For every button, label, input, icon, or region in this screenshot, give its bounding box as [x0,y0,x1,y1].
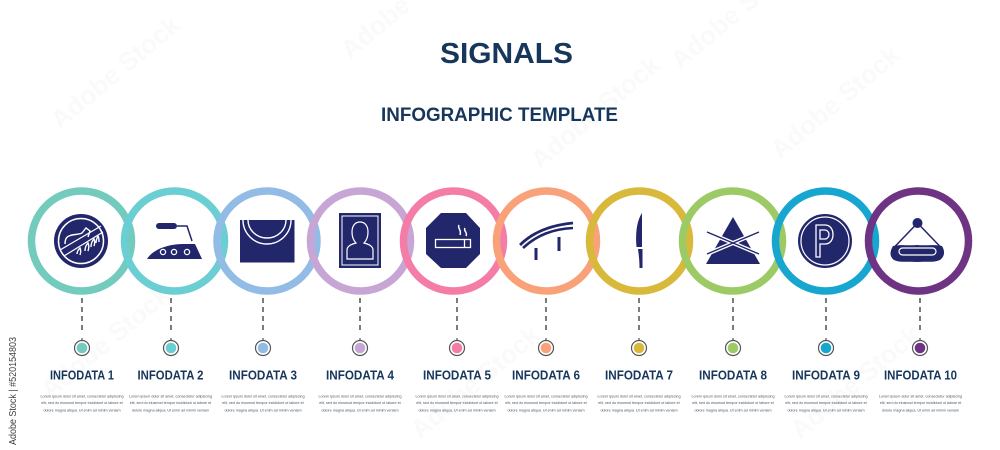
item 8: label and text: Lorem ipsum dolor sit amet, consectetur adipiscing [691,394,775,398]
item 5: label and text: dolore magna aliqua. Ut enim ad minim veniam [418,408,496,412]
item 5: connector and dot [450,298,464,356]
item 3: label and text: dolore magna aliqua. Ut enim ad minim veniam [224,408,302,412]
item 2: label and text: Lorem ipsum dolor sit amet, consectetur adipiscing [129,394,212,398]
item 8: label and text: elit, sed do eiusmod tempor incididunt ut labore et [692,401,774,405]
title: SIGNALS [440,38,573,70]
watermark: Adobe Stock [45,9,186,135]
item 5: ring [404,191,504,291]
item 9: ring [776,191,876,291]
item 10: label and text [879,368,962,412]
item 4: label and text [318,368,402,412]
subtitle: INFOGRAPHIC TEMPLATE [381,105,618,126]
item 7: connector and dot [632,298,646,356]
item 9: label and text: Lorem ipsum dolor sit amet, consectetur adipiscing [784,394,868,398]
item 9: label and text: INFODATA 9 [792,368,860,382]
item 9: label and text: dolore magna aliqua. Ut enim ad minim veniam [787,408,865,412]
icon: bridge [520,223,573,260]
item 3: label and text: INFODATA 3 [229,368,297,382]
item 5: label and text: INFODATA 5 [423,368,491,382]
item 8: label and text: INFODATA 8 [699,368,767,382]
item 9: connector and dot [818,298,834,356]
item 1: connector and dot [74,298,90,356]
stock id side text: Adobe Stock | #520154803 [7,337,19,445]
item 10: label and text: dolore magna aliqua. Ut enim ad minim veniam [882,408,959,412]
item 4: label and text: INFODATA 4 [326,368,395,382]
item 10: label and text: Lorem ipsum dolor sit amet, consectetur adipiscing [879,394,962,398]
item 1: label and text [40,368,124,412]
item 4: label and text: dolore magna aliqua. Ut enim ad minim veniam [321,408,399,412]
item 10: ring [868,191,968,291]
item 6: connector and dot [538,298,554,356]
item 2: label and text: dolore magna aliqua. Ut enim ad minim veniam [132,408,209,412]
watermark: Adobe Stock [35,279,176,405]
item 5: label and text: elit, sed do eiusmod tempor incididunt ut labore et [416,401,498,405]
item 3: label and text: Lorem ipsum dolor sit amet, consectetur adipiscing [221,394,305,398]
item 4: connector and dot [352,298,368,356]
item 7: label and text: Lorem ipsum dolor sit amet, consectetur adipiscing [597,394,681,398]
item 6: label and text: elit, sed do eiusmod tempor incididunt ut labore et [505,401,587,405]
icon: bag [240,220,294,262]
watermark: Adobe Stock [525,49,666,175]
item 2: connector and dot [164,298,178,356]
icon: no shoe sign [54,214,108,268]
item 3: ring [217,191,317,291]
item 2: label and text: elit, sed do eiusmod tempor incididunt ut labore et [130,401,211,405]
item 6: label and text [504,368,588,412]
item 2: label and text [129,368,212,412]
item 8: connector and dot [726,298,740,356]
item 8: label and text [691,368,775,412]
item 6: label and text: Lorem ipsum dolor sit amet, consectetur adipiscing [504,394,588,398]
item 9: label and text: elit, sed do eiusmod tempor incididunt ut labore et [785,401,867,405]
item 1: label and text: elit, sed do eiusmod tempor incididunt ut labore et [41,401,123,405]
item 1: label and text: dolore magna aliqua. Ut enim ad minim veniam [43,408,121,412]
icon: parking sign [798,214,852,268]
item 7: label and text: dolore magna aliqua. Ut enim ad minim veniam [600,408,678,412]
icon: crossed triangle [706,217,760,264]
item 7: label and text: INFODATA 7 [605,368,673,382]
item 2: label and text: INFODATA 2 [138,368,204,382]
item 7: ring [590,191,690,291]
item 5: label and text [415,368,499,412]
icon: knife [636,213,642,268]
item 9: label and text [784,368,868,412]
item 1: label and text: INFODATA 1 [50,368,114,382]
item 3: label and text: elit, sed do eiusmod tempor incididunt ut labore et [222,401,304,405]
icon: iron [147,223,202,259]
item 10: label and text: INFODATA 10 [884,368,957,382]
item 7: label and text [597,368,681,412]
item 10: connector and dot [912,298,928,356]
item 6: label and text: dolore magna aliqua. Ut enim ad minim veniam [507,408,585,412]
item 7: label and text: elit, sed do eiusmod tempor incididunt ut labore et [598,401,680,405]
item 5: label and text: Lorem ipsum dolor sit amet, consectetur adipiscing [415,394,499,398]
watermark: Adobe Stock [405,319,546,445]
item 4: ring [310,191,410,291]
item 3: connector and dot [256,298,270,356]
icon: no smoking octagon [426,213,480,268]
watermark: Adobe Stock [785,319,926,445]
item 6: ring [496,191,596,291]
item 8: ring [682,191,782,291]
item 3: label and text [221,368,305,412]
item 10: label and text: elit, sed do eiusmod tempor incididunt ut labore et [880,401,961,405]
item 4: label and text: elit, sed do eiusmod tempor incididunt ut labore et [319,401,401,405]
icon: hanging sign [890,218,944,262]
icon: framed portrait [339,213,381,268]
item 1: ring [32,191,132,291]
item 1: label and text: Lorem ipsum dolor sit amet, consectetur adipiscing [40,394,124,398]
item 6: label and text: INFODATA 6 [512,368,580,382]
item 8: label and text: dolore magna aliqua. Ut enim ad minim veniam [694,408,772,412]
item 2: ring [124,191,224,291]
watermark: Adobe Stock [765,39,906,165]
item 4: label and text: Lorem ipsum dolor sit amet, consectetur adipiscing [318,394,402,398]
